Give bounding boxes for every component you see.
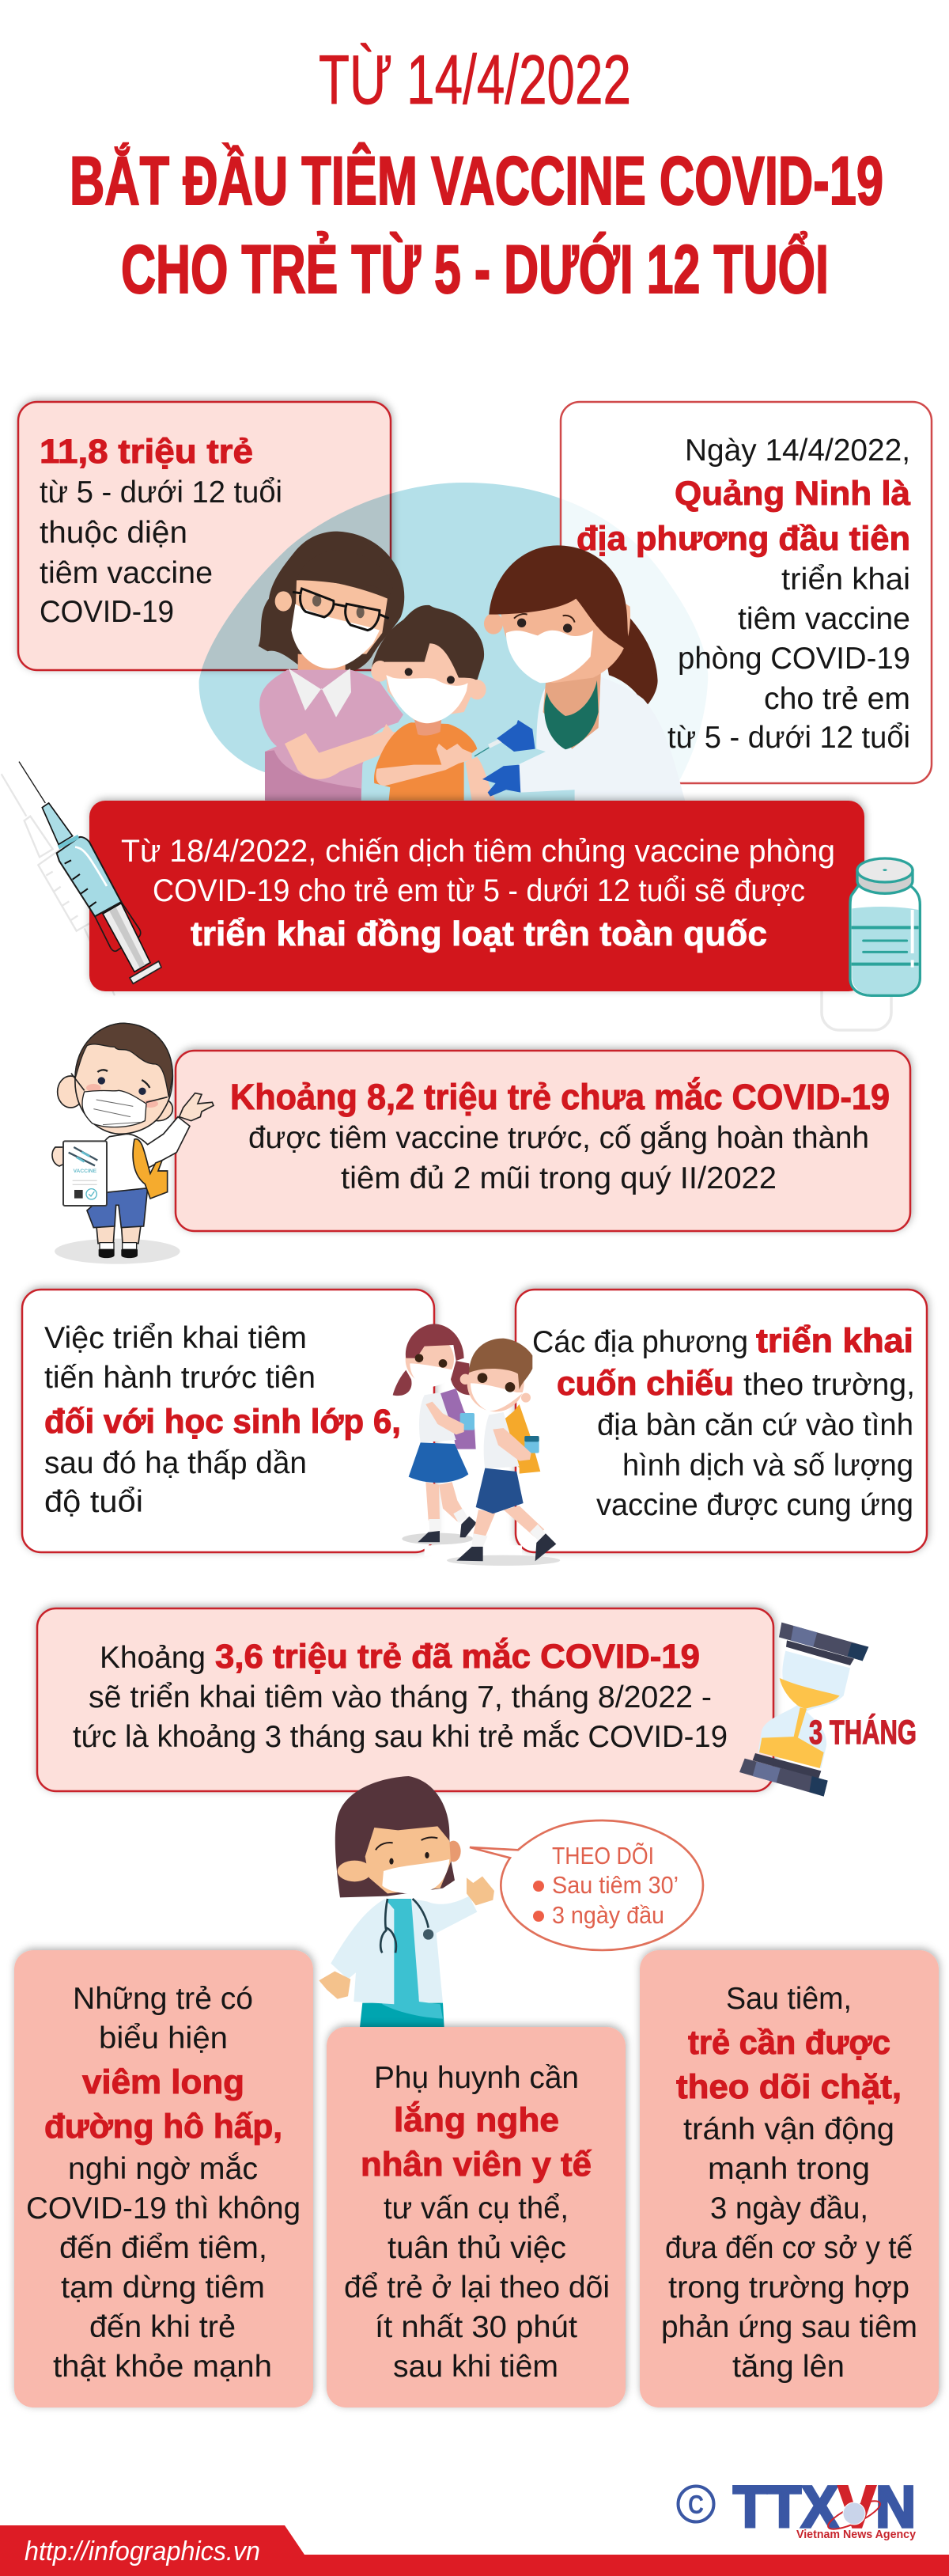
text: monitor children after injection: trong trường hợp bbox=[668, 2271, 909, 2305]
text: nationwide rollout bbox=[121, 834, 835, 953]
text: monitor children after injection: đưa đến cơ sở y tế bbox=[665, 2231, 913, 2265]
icon: ghost syringe bbox=[2, 774, 115, 995]
text: 3.6 million children: 3,6 triệu trẻ đã mắc COVID-19 bbox=[215, 1637, 700, 1676]
text: parents listen to health staff: sau khi tiêm bbox=[393, 2350, 558, 2384]
illustration: boy with vaccine card bbox=[52, 1023, 214, 1264]
text: Quang Ninh first locality: tiêm vaccine bbox=[738, 602, 910, 636]
text: nationwide rollout: COVID-19 cho trẻ em từ 5 - dưới 12 tuổi sẽ được bbox=[153, 873, 805, 908]
text: monitor children after injection: phản ứng sau tiêm bbox=[661, 2310, 917, 2344]
callout: monitoring speech bubble: THEO DÕI bbox=[552, 1842, 654, 1869]
panel: 3.6 million children bbox=[37, 1608, 773, 1791]
callout: monitoring speech bubble: Sau tiêm 30’ bbox=[552, 1871, 679, 1899]
icon: ghost vial bbox=[822, 886, 891, 1030]
text: monitor children after injection: Sau tiêm, bbox=[726, 1982, 852, 2016]
text: 3.6 million children bbox=[73, 1637, 728, 1754]
text: Quang Ninh first locality: Ngày 14/4/2022, bbox=[685, 434, 910, 468]
text: children with symptoms: viêm long bbox=[82, 2063, 244, 2101]
text: Quang Ninh first locality bbox=[577, 434, 911, 755]
logo: TTXVN: TTXVN bbox=[733, 2474, 916, 2540]
text: nationwide rollout: Từ 18/4/2022, chiến dịch tiêm chủng vaccine phòng bbox=[121, 834, 835, 869]
text: monitor children after injection: 3 ngày đầu, bbox=[710, 2191, 868, 2226]
text: monitor children after injection: mạnh trong bbox=[708, 2152, 870, 2186]
text: grade 6 first bbox=[44, 1321, 401, 1519]
text: parents listen to health staff: Phụ huynh cần bbox=[374, 2061, 579, 2095]
text: 8.2 million children bbox=[230, 1077, 890, 1195]
text: children with symptoms: đường hô hấp, bbox=[44, 2108, 282, 2146]
text: rolling rollout: vaccine được cung ứng bbox=[596, 1488, 913, 1522]
text: parents listen to health staff: nhân viên y tế bbox=[361, 2146, 592, 2184]
text: children with symptoms: đến khi trẻ bbox=[89, 2310, 236, 2344]
text: Quang Ninh first locality: từ 5 - dưới 12 tuổi bbox=[667, 721, 910, 755]
text: children with symptoms: tạm dừng tiêm bbox=[61, 2271, 265, 2305]
mother bbox=[259, 532, 417, 801]
text: monitor children after injection bbox=[661, 1982, 917, 2384]
title bbox=[70, 40, 883, 308]
text: monitor children after injection: trẻ cần được bbox=[688, 2024, 890, 2062]
icon: syringe bbox=[19, 762, 161, 983]
text: Quang Ninh first locality: địa phương đầu tiên bbox=[577, 520, 910, 558]
text: rolling rollout: địa bàn căn cứ vào tình bbox=[597, 1408, 913, 1442]
text: children with symptoms: Những trẻ có bbox=[73, 1982, 253, 2016]
text: 3.6 million children: tức là khoảng 3 tháng sau khi trẻ mắc COVID-19 bbox=[73, 1720, 728, 1754]
text: grade 6 first: độ tuổi bbox=[44, 1485, 143, 1519]
text: grade 6 first: Việc triển khai tiêm bbox=[44, 1321, 307, 1355]
logo: TTXVN: C bbox=[688, 2490, 704, 2519]
illustration: mother, child and nurse bbox=[259, 532, 686, 801]
text: parents listen to health staff bbox=[344, 2061, 610, 2384]
text: 11,8 million children: thuộc diện bbox=[40, 516, 187, 550]
title: TỪ 14/4/2022 bbox=[319, 40, 631, 119]
text: Quang Ninh first locality: phòng COVID-19 bbox=[678, 642, 910, 676]
panel: parents listen to health staff bbox=[327, 2027, 626, 2407]
text: children with symptoms: thật khỏe mạnh bbox=[53, 2350, 272, 2384]
text: monitor children after injection: tăng lên bbox=[732, 2350, 845, 2384]
gloves and syringe bbox=[475, 720, 535, 797]
panel: Quang Ninh box bbox=[561, 402, 932, 783]
text: 3.6 million children: sẽ triển khai tiêm vào tháng 7, tháng 8/2022 - bbox=[89, 1680, 712, 1714]
text: parents listen to health staff: tuân thủ việc bbox=[388, 2231, 566, 2265]
illustration: boy with vaccine card: VACCINE bbox=[74, 1169, 97, 1174]
text: children with symptoms: nghi ngờ mắc bbox=[68, 2152, 258, 2186]
text: children with symptoms bbox=[26, 1982, 301, 2384]
panel: children with symptoms bbox=[14, 1950, 313, 2407]
text: 11,8 million children bbox=[40, 433, 282, 629]
text: nationwide rollout: triển khai đồng loạt trên toàn quốc bbox=[191, 915, 767, 953]
panel: grade 6 first bbox=[22, 1290, 434, 1552]
text: rolling rollout: theo trường, bbox=[743, 1368, 915, 1402]
illustration: doctor bbox=[319, 1776, 494, 2028]
text: parents listen to health staff: để trẻ ở lại theo dõi bbox=[344, 2271, 610, 2305]
girl bbox=[393, 1324, 477, 1542]
panel: 8.2 million children bbox=[176, 1051, 910, 1231]
text: grade 6 first: tiến hành trước tiên bbox=[44, 1361, 316, 1395]
text: rolling rollout: hình dịch và số lượng bbox=[622, 1449, 913, 1483]
icon: hourglass bbox=[739, 1623, 868, 1797]
footer band bbox=[0, 2525, 949, 2576]
text: children with symptoms: đến điểm tiêm, bbox=[59, 2231, 267, 2265]
text: 3.6 million children: Khoảng bbox=[100, 1641, 206, 1675]
logo: TTXVN: Vietnam News Agency bbox=[796, 2528, 917, 2541]
text: children with symptoms: COVID-19 thì không bbox=[26, 2191, 301, 2226]
text: parents listen to health staff: lắng nghe bbox=[394, 2101, 559, 2139]
text: 8.2 million children: Khoảng 8,2 triệu trẻ chưa mắc COVID-19 bbox=[230, 1077, 890, 1117]
text: Quang Ninh first locality: triển khai bbox=[781, 563, 910, 597]
callout: monitoring speech bubble bbox=[470, 1820, 703, 1950]
panel: 11,8 million children box bbox=[18, 402, 391, 670]
boy bbox=[456, 1339, 556, 1561]
text: rolling rollout: cuốn chiếu bbox=[557, 1365, 734, 1403]
text: monitor children after injection: tránh vận động bbox=[683, 2112, 894, 2146]
footer band: http://infographics.vn bbox=[25, 2536, 260, 2567]
text: monitor children after injection: theo dõi chặt, bbox=[676, 2068, 902, 2106]
text: rolling rollout: triển khai bbox=[756, 1322, 913, 1360]
illustration: school children bbox=[393, 1324, 560, 1566]
illustration background blob bbox=[199, 483, 708, 801]
icon: vaccine vial bbox=[850, 858, 920, 995]
panel: nationwide red banner bbox=[89, 801, 864, 991]
text: grade 6 first: sau đó hạ thấp dần bbox=[44, 1446, 307, 1480]
text: 11,8 million children: 11,8 triệu trẻ bbox=[40, 433, 253, 471]
text: children with symptoms: biểu hiện bbox=[99, 2021, 228, 2055]
panel: rolling rollout bbox=[516, 1290, 927, 1552]
text: Quang Ninh first locality: Quảng Ninh là bbox=[675, 475, 911, 513]
text: grade 6 first: đối với học sinh lớp 6, bbox=[44, 1403, 401, 1441]
text: rolling rollout bbox=[532, 1322, 915, 1522]
text: 11,8 million children: từ 5 - dưới 12 tuổi bbox=[40, 475, 282, 510]
panel: monitor children after injection bbox=[640, 1950, 939, 2407]
text: parents listen to health staff: tư vấn cụ thể, bbox=[384, 2191, 569, 2226]
text: rolling rollout: Các địa phương bbox=[532, 1325, 748, 1359]
text: Quang Ninh first locality: cho trẻ em bbox=[764, 682, 910, 716]
text: 11,8 million children: tiêm vaccine bbox=[40, 556, 213, 590]
text: 8.2 million children: được tiêm vaccine trước, cố gắng hoàn thành bbox=[248, 1121, 869, 1155]
callout: monitoring speech bubble: 3 ngày đầu bbox=[552, 1901, 664, 1929]
text: 11,8 million children: COVID-19 bbox=[40, 595, 174, 629]
text: parents listen to health staff: ít nhất 30 phút bbox=[375, 2310, 577, 2344]
child bbox=[371, 605, 496, 801]
text: 8.2 million children: tiêm đủ 2 mũi trong quý II/2022 bbox=[341, 1161, 777, 1195]
nurse bbox=[484, 545, 686, 801]
